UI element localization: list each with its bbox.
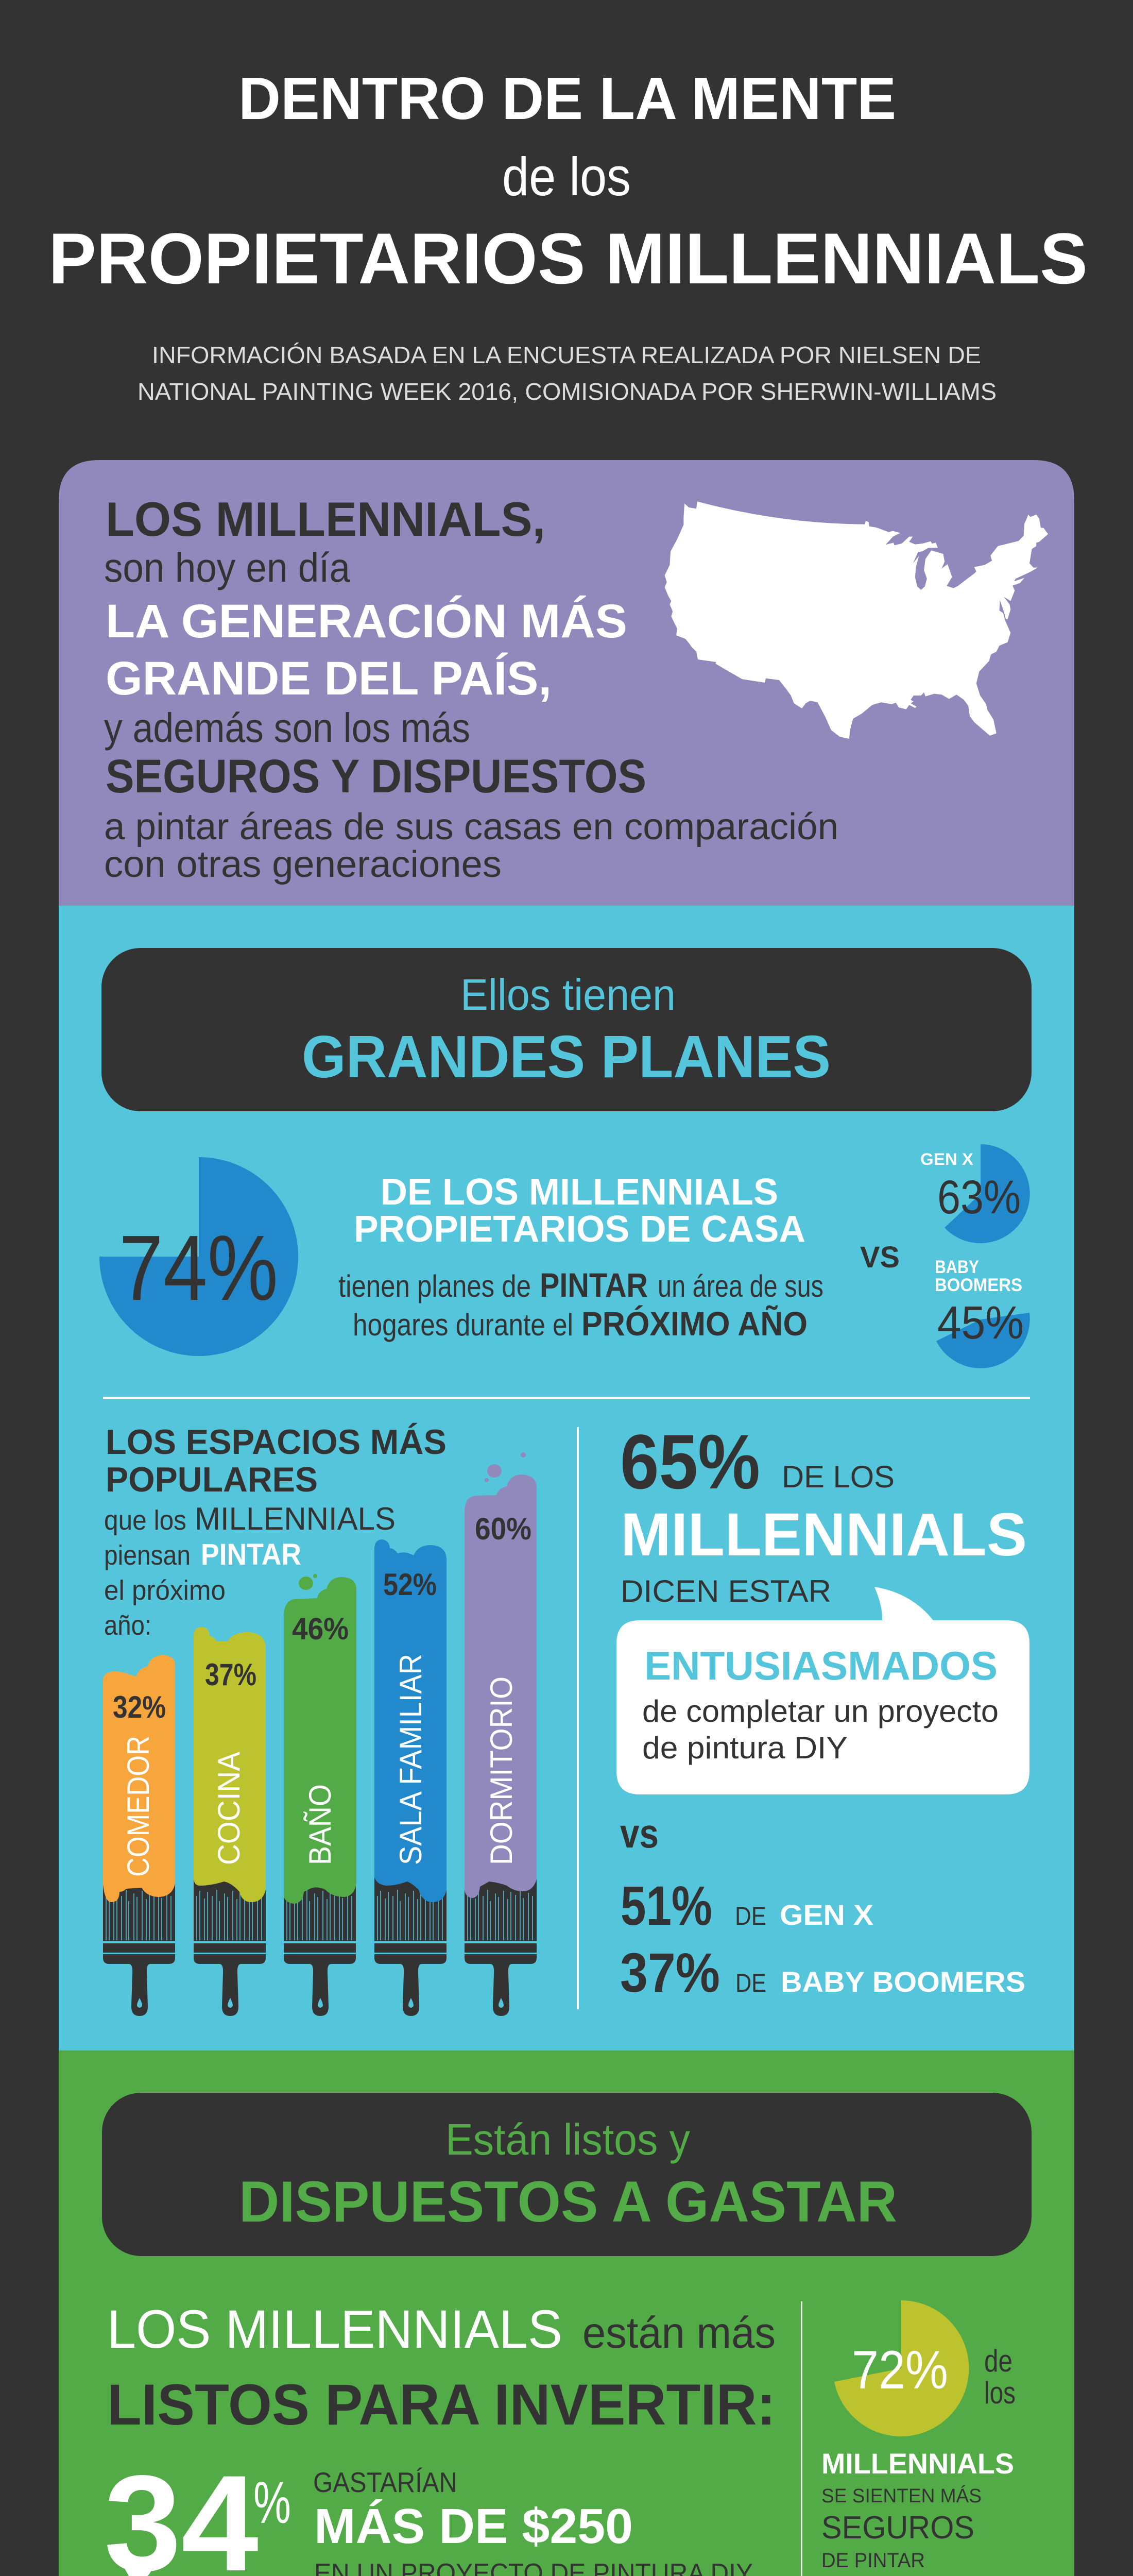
brush: comedor 32%: 32% [113, 1690, 166, 1724]
chart: 72% pie: 72% [852, 2340, 948, 2400]
intro text: SEGUROS Y DISPUESTOS [106, 750, 646, 803]
stat: 34% with paint drips: % [253, 2470, 291, 2536]
text: most popular spaces: POPULARES [106, 1460, 318, 1499]
text: most popular spaces: que los [104, 1505, 186, 1536]
comparison: gen x and boomers: DE [735, 1969, 766, 1997]
intro text: son hoy en día [104, 545, 350, 590]
chart: 74% pie: 74% [119, 1216, 278, 1320]
brush: baño 46%: BAÑO [303, 1784, 337, 1865]
brush: cocina 37% [194, 1627, 266, 2016]
comparison: gen x and boomers: 37% [620, 1941, 720, 2004]
brush: comedor 32%: COMEDOR [121, 1736, 156, 1877]
brush: cocina 37%: 37% [205, 1657, 256, 1692]
brush: baño 46% [284, 1574, 356, 2016]
intro text: a pintar áreas de sus casas en comparación [104, 806, 838, 848]
callout: speech bubble [616, 1587, 1029, 1794]
stat: 65% diy enthusiasm: DE LOS [782, 1460, 895, 1494]
comparison: gen x and boomers: 51% [621, 1874, 712, 1937]
intro text: y además son los más [104, 705, 470, 751]
text: plans statement: hogares durante el [353, 1308, 573, 1342]
chart: gen x 63% pie: GEN X [920, 1150, 974, 1168]
brush: sala familiar 52% [374, 1539, 447, 2016]
callout: speech bubble: de completar un proyecto [642, 1694, 999, 1728]
text: most popular spaces: piensan [104, 1540, 191, 1571]
label: vs: VS [860, 1241, 900, 1274]
chart: 72% pie: los [984, 2376, 1016, 2410]
chart: baby boomers 45% pie: BOOMERS [935, 1275, 1022, 1295]
panel: ready to spend [59, 2050, 1074, 2576]
text: ready to invest [107, 2299, 776, 2437]
title: de los [502, 147, 631, 207]
comparison: gen x and boomers: vs [620, 1810, 659, 1856]
text: more confident: MILLENNIALS [821, 2447, 1014, 2480]
text: plans statement: PRÓXIMO AÑO [581, 1304, 808, 1343]
text: plans statement [338, 1172, 823, 1343]
text: plans statement: un área de sus [658, 1269, 823, 1303]
brush: dormitorio 60%: 60% [475, 1512, 531, 1546]
subtitle: survey source: INFORMACIÓN BASADA EN LA ENCUESTA REALIZADA POR NIELSEN DE [152, 342, 981, 368]
intro text [104, 492, 838, 885]
text: more confident: DE PINTAR [821, 2549, 925, 2572]
text: most popular spaces: PINTAR [201, 1538, 301, 1571]
text: plans statement: PROPIETARIOS DE CASA [354, 1209, 805, 1250]
icon: map of the United States [665, 501, 1048, 739]
comparison: gen x and boomers: BABY BOOMERS [781, 1965, 1025, 1998]
text: plans statement: PINTAR [540, 1266, 648, 1304]
brush: dormitorio 60%: DORMITORIO [484, 1676, 519, 1865]
title: DENTRO DE LA MENTE [238, 65, 896, 132]
text: more confident: SE SIENTEN MÁS [821, 2485, 982, 2507]
subtitle: survey source: NATIONAL PAINTING WEEK 2016, COMISIONADA POR SHERWIN-WILLIAMS [138, 378, 997, 405]
brush: sala familiar 52%: 52% [383, 1567, 437, 1602]
text: ready to invest: LOS MILLENNIALS [107, 2299, 562, 2360]
panel: largest generation [59, 460, 1074, 906]
text: ready to invest: están más [582, 2309, 776, 2358]
text: most popular spaces: año: [104, 1610, 151, 1641]
brush: comedor 32% [103, 1655, 175, 2016]
comparison: gen x and boomers: DE [735, 1902, 766, 1930]
text: most popular spaces: el próximo [104, 1575, 226, 1606]
intro text: LA GENERACIÓN MÁS [106, 595, 627, 648]
brush: baño 46%: 46% [292, 1612, 349, 1646]
callout: speech bubble: ENTUSIASMADOS [644, 1643, 998, 1688]
comparison: gen x and boomers: GEN X [780, 1899, 873, 1931]
intro text: GRANDE DEL PAÍS, [106, 652, 552, 705]
title [48, 65, 1088, 299]
intro text: con otras generaciones [104, 844, 502, 885]
stat: 65% diy enthusiasm [620, 1418, 1027, 1608]
heading: grandes planes: GRANDES PLANES [302, 1023, 831, 1090]
heading: dispuestos a gastar: DISPUESTOS A GASTAR [239, 2170, 897, 2234]
heading: dispuestos a gastar: Están listos y [445, 2115, 690, 2164]
heading: grandes planes [101, 948, 1032, 1111]
stat: 65% diy enthusiasm: MILLENNIALS [621, 1501, 1027, 1569]
chart: baby boomers 45% pie [935, 1257, 1030, 1368]
subtitle: survey source [138, 342, 997, 405]
text: more confident: SEGUROS [821, 2510, 974, 2546]
chart: 74% pie [99, 1157, 298, 1356]
callout: speech bubble: de pintura DIY [642, 1731, 848, 1765]
brush: cocina 37%: COCINA [212, 1752, 246, 1865]
text: most popular spaces [104, 1422, 447, 1641]
text: most popular spaces: MILLENNIALS [195, 1501, 396, 1537]
heading: dispuestos a gastar [102, 2093, 1032, 2256]
text: plans statement: tienen planes de [338, 1269, 531, 1303]
panel: big plans [59, 906, 1074, 2050]
chart: 72% pie [834, 2300, 1016, 2436]
brush: dormitorio 60% [465, 1452, 537, 2016]
text: spending amounts: GASTARÍAN [313, 2466, 457, 2498]
text: plans statement: DE LOS MILLENNIALS [381, 1172, 778, 1213]
title: PROPIETARIOS MILLENNIALS [48, 218, 1088, 299]
text: spending amounts [313, 2466, 758, 2576]
chart: baby boomers 45% pie: BABY [935, 1257, 979, 1277]
comparison: gen x and boomers [620, 1810, 1025, 2004]
chart: gen x 63% pie [920, 1144, 1030, 1243]
stat: 65% diy enthusiasm: 65% [620, 1418, 760, 1505]
chart: 72% pie: de [984, 2344, 1012, 2378]
brush: sala familiar 52%: SALA FAMILIAR [393, 1654, 428, 1865]
stat: 65% diy enthusiasm: DICEN ESTAR [621, 1574, 831, 1608]
text: more confident [821, 2447, 1014, 2576]
text: ready to invest: LISTOS PARA INVERTIR: [107, 2372, 776, 2437]
text: spending amounts: MÁS DE $250 [314, 2499, 633, 2554]
text: most popular spaces: LOS ESPACIOS MÁS [106, 1422, 447, 1462]
chart: gen x 63% pie: 63% [937, 1171, 1021, 1224]
heading: grandes planes: Ellos tienen [460, 971, 676, 1020]
intro text: LOS MILLENNIALS, [106, 492, 545, 546]
chart: baby boomers 45% pie: 45% [937, 1297, 1024, 1349]
